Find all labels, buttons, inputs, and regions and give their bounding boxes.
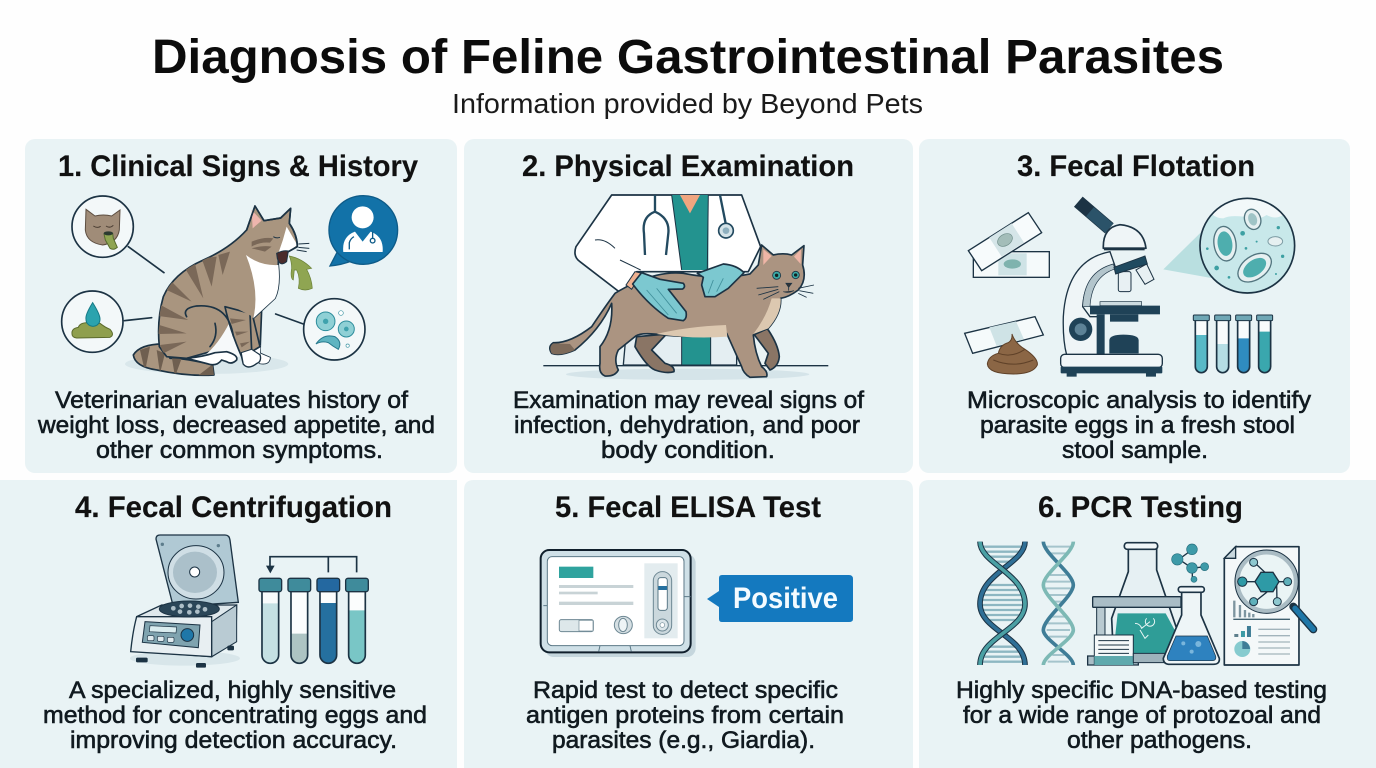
tail <box>133 344 214 375</box>
illustration: tabby cat <box>133 206 312 377</box>
title: Diagnosis of Feline Gastrointestinal Parasites <box>152 31 1224 84</box>
heading: fecal flotation: 3. Fecal Flotation <box>1017 150 1255 183</box>
icon: small flask with blue liquid <box>1163 587 1219 664</box>
vet in white coat <box>575 195 761 365</box>
panel: 2. physical examination <box>464 139 913 473</box>
body text: physical examination: infection, dehydration, and poor <box>514 412 860 439</box>
body text: physical examination <box>513 387 864 464</box>
body text: clinical signs: other common symptoms. <box>96 437 383 464</box>
illustration: microscope and samples <box>965 198 1295 377</box>
near foreleg <box>225 307 260 367</box>
icon: large DNA helix <box>980 542 1025 665</box>
illustration: sick cat with symptom icons <box>62 196 398 377</box>
heading: clinical signs: 1. Clinical Signs & History <box>58 150 418 183</box>
body text: ELISA test <box>526 677 844 754</box>
body text: clinical signs: Veterinarian evaluates history of <box>55 387 408 414</box>
body <box>159 206 297 358</box>
body text: fecal centrifugation: improving detection accuracy. <box>70 727 397 754</box>
body text: ELISA test: Rapid test to detect specific <box>533 677 838 704</box>
stethoscope <box>644 195 726 255</box>
body text: PCR testing: for a wide range of protozoal and <box>963 702 1321 729</box>
subtitle: Information provided by Beyond Pets <box>452 88 923 119</box>
body text: clinical signs: weight loss, decreased appetite, and <box>37 412 435 439</box>
icon: vomiting cat face <box>72 196 133 257</box>
body text: ELISA test: antigen proteins from certain <box>526 702 844 729</box>
illustration: centrifuge and tubes <box>130 535 368 668</box>
body text: fecal centrifugation: A specialized, highly sensitive <box>69 677 396 704</box>
far foreleg <box>250 310 270 364</box>
body text: fecal flotation: parasite eggs in a fresh stool <box>980 412 1295 439</box>
test cassette <box>653 572 672 634</box>
body text: PCR testing: other pathogens. <box>1067 727 1252 754</box>
body text: PCR testing <box>956 677 1327 754</box>
gloved hands <box>626 264 744 321</box>
lab stand and clipboard <box>1088 607 1138 665</box>
body text: clinical signs <box>37 387 435 464</box>
centrifuge tubes <box>259 578 368 663</box>
body text: fecal flotation <box>967 387 1311 464</box>
body text: PCR testing: Highly specific DNA-based testing <box>956 677 1327 704</box>
illustration: DNA and lab equipment <box>980 542 1313 665</box>
magnified view with eggs <box>1163 198 1295 293</box>
icon: molecule <box>1172 544 1209 582</box>
heading: PCR testing: 6. PCR Testing <box>1038 491 1243 524</box>
cat <box>550 245 814 377</box>
heading: fecal centrifugation: 4. Fecal Centrifugation <box>75 491 392 524</box>
glass slides <box>968 213 1049 277</box>
heading: physical examination: 2. Physical Examination <box>522 150 854 183</box>
illustration: vet examining cat <box>543 195 828 380</box>
centrifuge <box>131 535 238 668</box>
body text: fecal centrifugation <box>43 677 427 754</box>
panel: 6. PCR testing <box>919 480 1376 768</box>
body text: fecal centrifugation: method for concentrating eggs and <box>43 702 427 729</box>
icon: parasites under lens <box>304 299 365 360</box>
icon: vomit stream <box>289 256 312 290</box>
test tubes <box>1193 315 1273 373</box>
icon: veterinarian speech bubble <box>329 196 398 266</box>
body text: physical examination: Examination may reveal signs of <box>513 387 864 414</box>
icon: small DNA helix <box>1043 542 1073 665</box>
heading: ELISA test: 5. Fecal ELISA Test <box>555 491 821 524</box>
transfer arrow <box>266 557 357 573</box>
body text: fecal flotation: Microscopic analysis to identify <box>967 387 1311 414</box>
body text: ELISA test: parasites (e.g., Giardia). <box>552 727 815 754</box>
panel: 3. fecal flotation <box>919 139 1350 473</box>
illustration: ELISA test device <box>541 550 696 657</box>
body text: fecal flotation: stool sample. <box>1062 437 1208 464</box>
icon: report with magnifier <box>1224 547 1313 665</box>
callout: positive result <box>707 575 853 622</box>
panel: 4. fecal centrifugation <box>0 480 457 768</box>
panel: 5. fecal ELISA test <box>464 480 913 768</box>
panel: 1. clinical signs and history <box>25 139 457 473</box>
icon: stool with droplet <box>62 291 123 352</box>
icon: clipboard notes <box>1094 635 1172 665</box>
sample slide and stool <box>965 317 1043 374</box>
stripes <box>158 238 273 353</box>
body text: physical examination: body condition. <box>601 437 775 464</box>
microscope <box>1061 202 1162 377</box>
icon: large flask <box>1112 543 1178 653</box>
callout: positive result: Positive <box>733 582 838 615</box>
belly and hind foot <box>203 322 240 357</box>
